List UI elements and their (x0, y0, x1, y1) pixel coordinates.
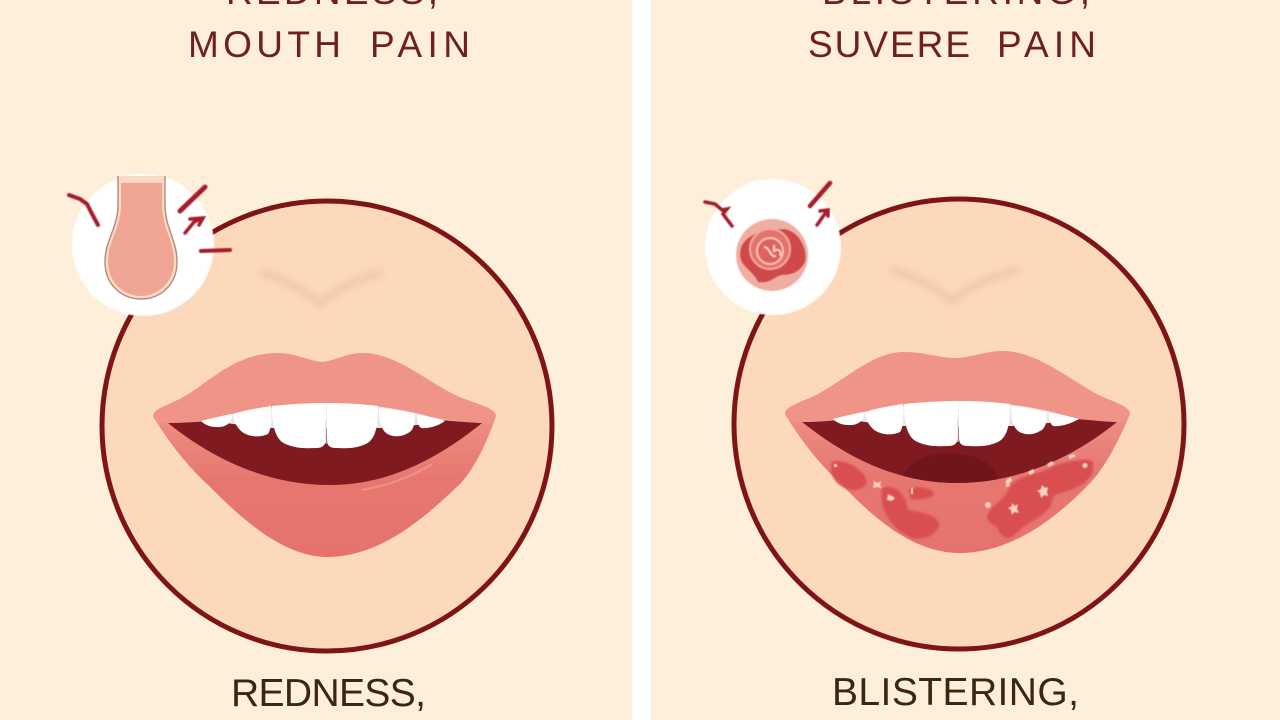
icon: left nose shadow (262, 273, 380, 304)
panel: left background (0, 0, 632, 720)
upper lip (785, 351, 1130, 422)
blister spots (834, 454, 1088, 515)
mouth interior (168, 410, 482, 485)
icon: pain marks (705, 183, 830, 226)
panel: left face circle (102, 201, 552, 651)
heading: right top (808, 0, 1096, 65)
inset white circle (72, 174, 214, 316)
icon: blister (736, 219, 808, 291)
lower lip (785, 414, 1130, 553)
callout: right blister inset (705, 179, 841, 315)
panel: right background (651, 0, 1280, 720)
sore patches (831, 460, 1093, 539)
heading: right top: PAIN (997, 24, 1096, 65)
caption: right bottom: BLISTERING, (832, 671, 1079, 714)
teeth (201, 403, 445, 448)
icon: tongue (105, 176, 177, 299)
inset white circle (705, 179, 841, 315)
mouth interior (802, 408, 1117, 483)
heading: right top: SUVERE (808, 24, 970, 65)
heading: left top: MOUTH (188, 24, 341, 65)
caption: left bottom: REDNESS, (231, 672, 426, 715)
teeth (833, 401, 1079, 446)
heading: left top: PAIN (370, 24, 470, 65)
icon: pain marks (69, 187, 230, 251)
tongue shadow (903, 453, 998, 483)
panel: right face circle (734, 199, 1184, 649)
lower lip (153, 416, 496, 557)
illustration: red lips (153, 353, 496, 557)
heading: left top (188, 0, 470, 65)
callout: left tongue inset (69, 174, 230, 316)
illustration: blistered lips (785, 351, 1130, 553)
lip highlight (362, 464, 432, 490)
icon: right nose shadow (893, 270, 1018, 301)
upper lip (153, 353, 496, 423)
